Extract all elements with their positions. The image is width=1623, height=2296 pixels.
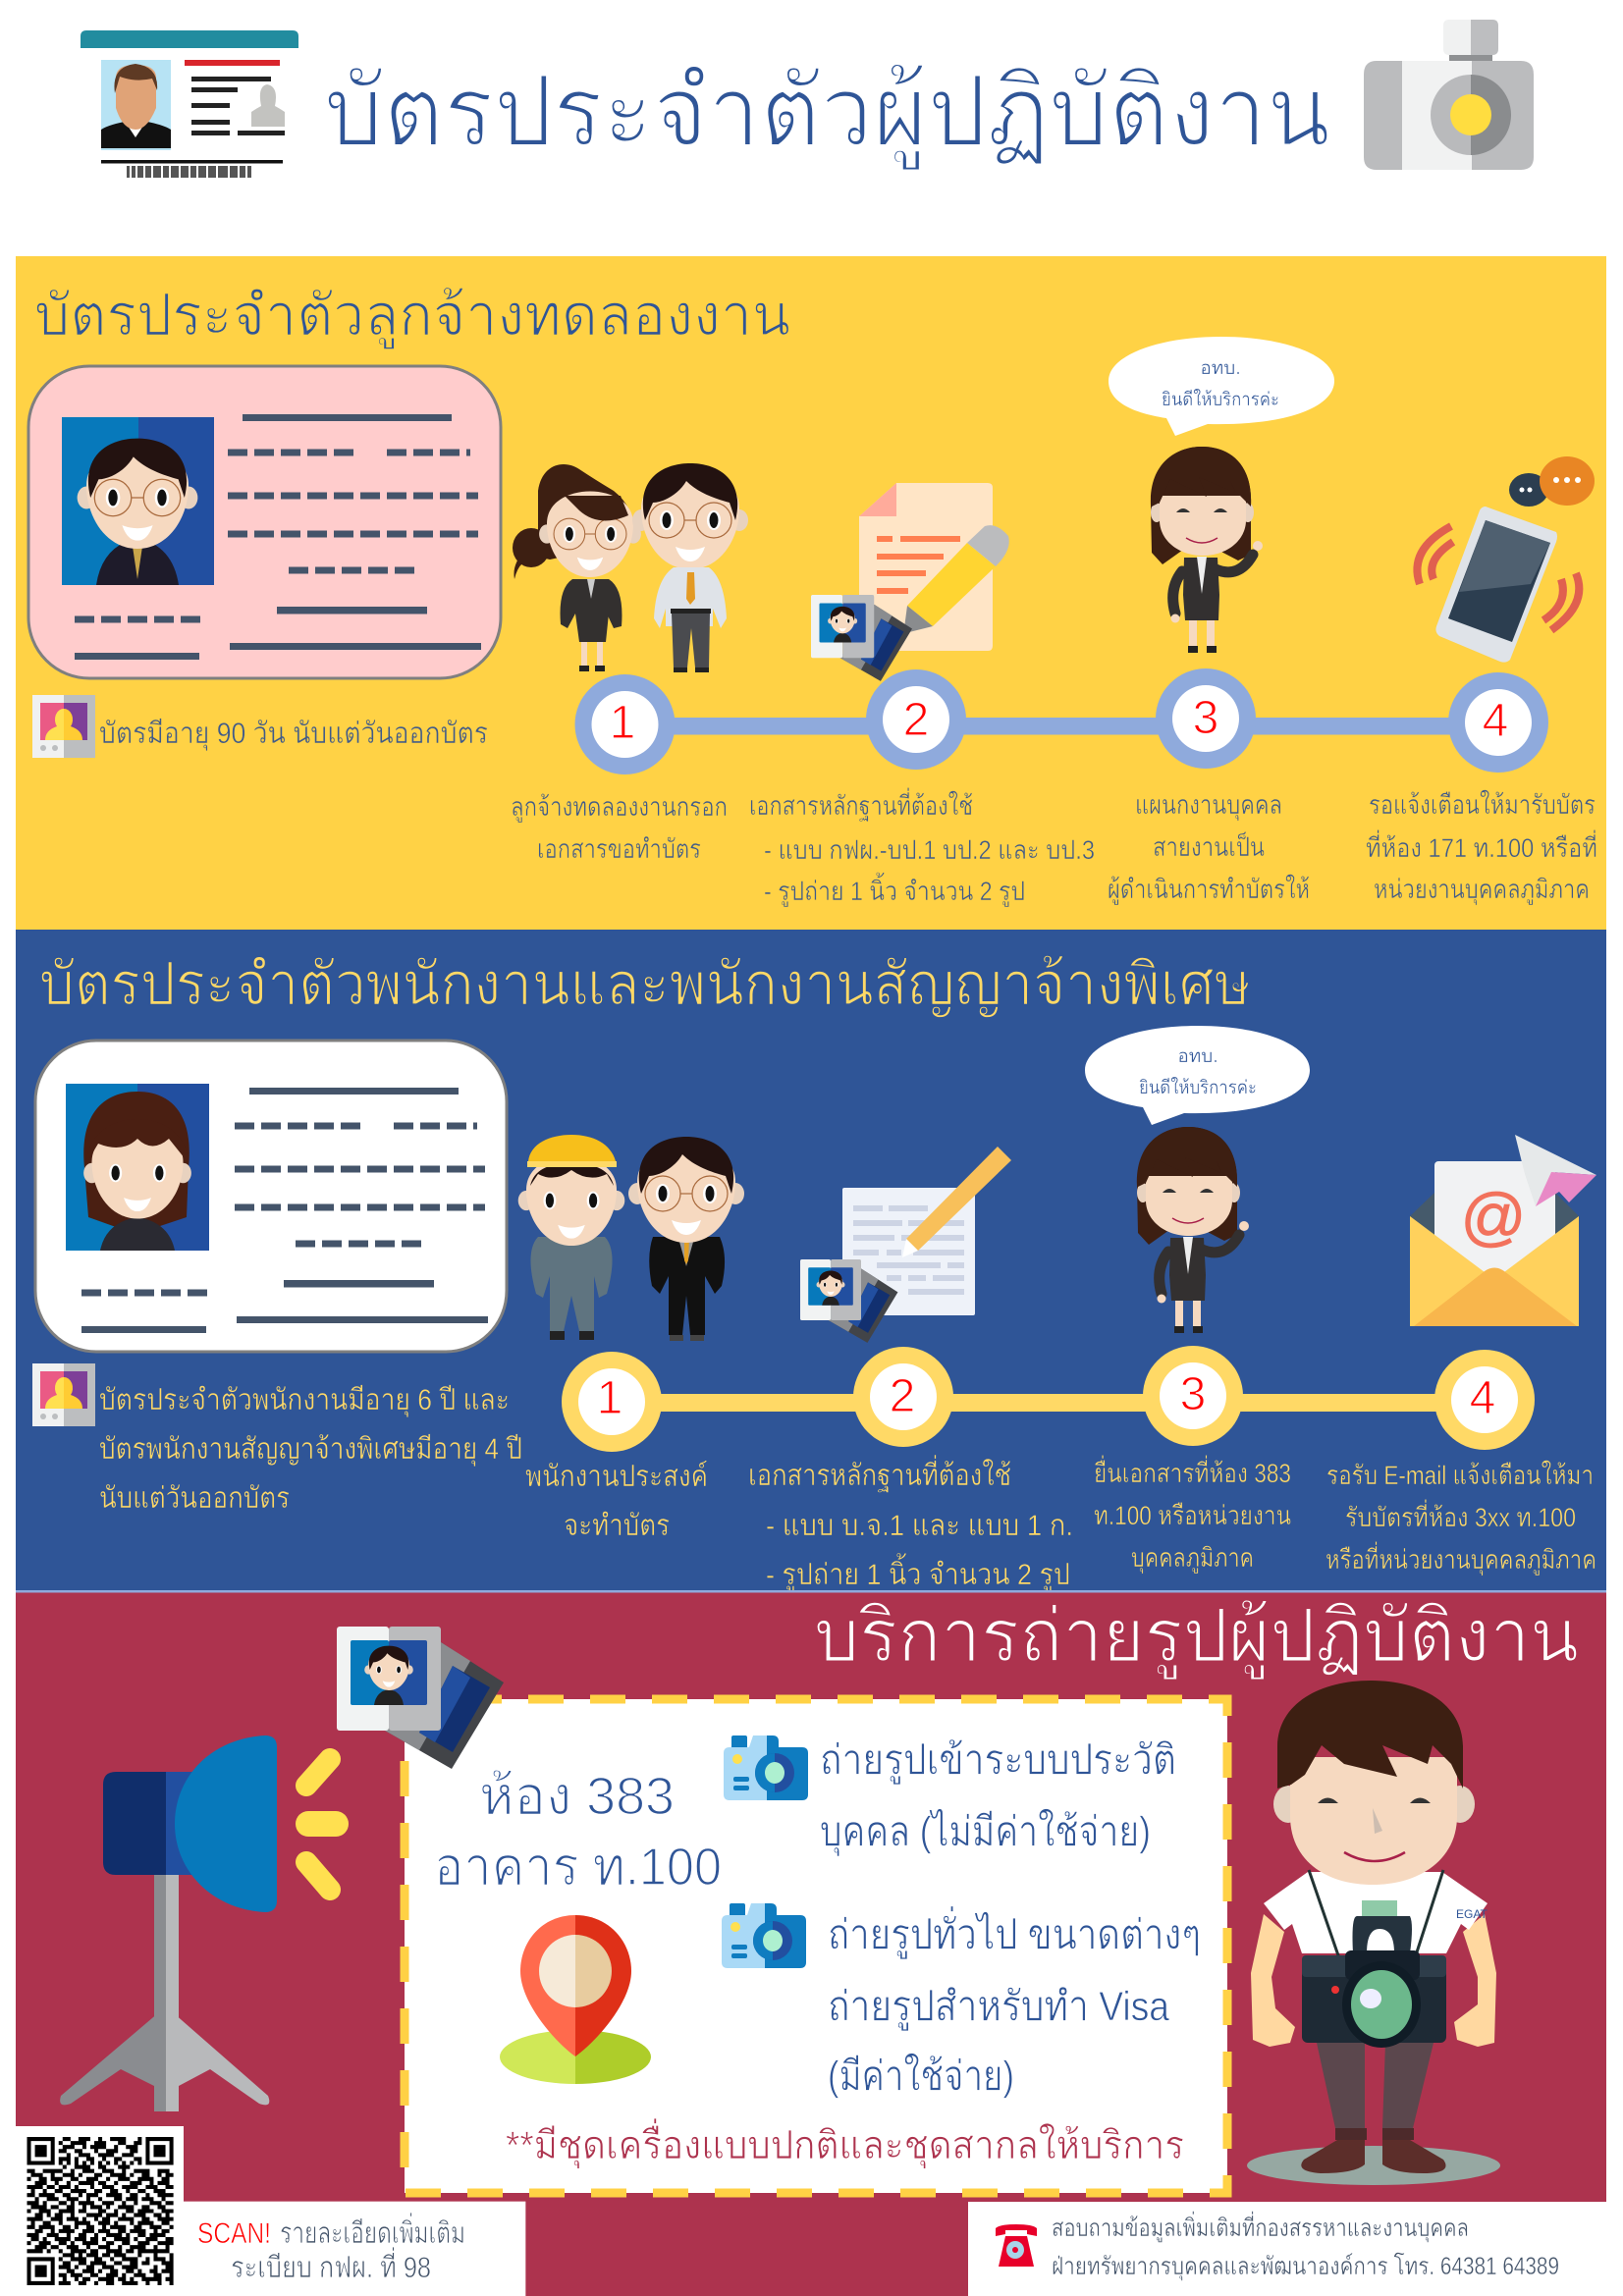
figures: probation employees bbox=[513, 463, 748, 672]
card validity note: บัตรมีอายุ 90 วัน นับแต่วันออกบัตร bbox=[99, 718, 488, 752]
service box bbox=[405, 1699, 1227, 2193]
step 2 text bbox=[749, 787, 1095, 907]
step 2 text: - แบบ กฟผ.-บป.1 บป.2 และ บป.3 bbox=[764, 835, 1095, 865]
step 3 text bbox=[1108, 790, 1310, 905]
figure: HR officer with speech bubble: อทบ. bbox=[1200, 358, 1241, 379]
icon: photo slide bbox=[337, 1627, 504, 1769]
footer: contact: สอบถามข้อมูลเพิ่มเติมที่กองสรรหาและงานบุคคล bbox=[1052, 2211, 1469, 2243]
step 2 text: - รูปถ่าย 1 นิ้ว จำนวน 2 รูป bbox=[766, 1553, 1070, 1592]
figures: employees bbox=[518, 1135, 744, 1341]
step marker 2: 2 bbox=[903, 694, 929, 746]
room location text: ห้อง 383 bbox=[479, 1767, 675, 1826]
step 1 text bbox=[525, 1460, 708, 1542]
step marker 4 bbox=[1448, 672, 1548, 773]
step 3 text: ยื่นเอกสารที่ห้อง 383 bbox=[1094, 1455, 1291, 1488]
figure: HR officer with speech bubble bbox=[1109, 337, 1334, 653]
timeline: employee steps bbox=[562, 1346, 1535, 1452]
uniform note: **มีชุดเครื่องแบบปกติและชุดสากลให้บริการ bbox=[506, 2118, 1184, 2169]
room location text: อาคาร ท.100 bbox=[434, 1838, 722, 1896]
card validity note: บัตรประจำตัวพนักงานมีอายุ 6 ปี และ bbox=[99, 1384, 510, 1418]
figure: email envelope: @ bbox=[1461, 1180, 1526, 1253]
heading: employee card: บัตรประจำตัวพนักงานและพนักงานสัญญาจ้างพิเศษ bbox=[39, 951, 1251, 1018]
step 2 text: - แบบ บ.จ.1 และ แบบ 1 ก. bbox=[766, 1510, 1073, 1542]
figure: HR officer with speech bubble bbox=[1085, 1026, 1310, 1333]
card validity note bbox=[99, 1384, 522, 1515]
step marker 4 bbox=[1434, 1350, 1535, 1450]
step 3 text: สายงานเป็น bbox=[1153, 829, 1265, 862]
step marker 1: 1 bbox=[597, 1372, 622, 1424]
step marker 1 bbox=[562, 1352, 662, 1452]
figure: email envelope bbox=[1410, 1135, 1596, 1326]
panel: employee card (blue) bbox=[16, 930, 1606, 1592]
step 3 text: บุคคลภูมิภาค bbox=[1131, 1543, 1254, 1575]
icon: camera bbox=[724, 1735, 808, 1800]
heading: probation card: บัตรประจำตัวลูกจ้างทดลองงาน bbox=[34, 284, 790, 349]
timeline: probation steps bbox=[575, 668, 1548, 774]
step 2 text: เอกสารหลักฐานที่ต้องใช้ bbox=[749, 787, 973, 822]
icon: location pin bbox=[500, 1915, 651, 2084]
step marker 3: 3 bbox=[1193, 692, 1218, 744]
figure: HR officer with speech bubble: อทบ. bbox=[1177, 1046, 1218, 1067]
figure: phone notification bbox=[1417, 456, 1595, 663]
service: general photo: (มีค่าใช้จ่าย) bbox=[828, 2053, 1014, 2099]
service: HR system photo: ถ่ายรูปเข้าระบบประวัติ bbox=[820, 1736, 1176, 1785]
step marker 4: 4 bbox=[1470, 1372, 1495, 1424]
figure: photographer: EGAT bbox=[1456, 1907, 1488, 1921]
figure: HR officer with speech bubble: ยินดีให้บริการค่ะ bbox=[1162, 389, 1279, 410]
icon: telephone bbox=[996, 2224, 1037, 2267]
icon: card validity bbox=[32, 695, 95, 758]
card illustration bbox=[28, 366, 501, 678]
figure: photographer bbox=[1247, 1681, 1500, 2185]
step marker 2: 2 bbox=[890, 1370, 915, 1422]
step 1 text: จะทำบัตร bbox=[564, 1510, 670, 1542]
step 3 text: ผู้ดำเนินการทำบัตรให้ bbox=[1108, 874, 1310, 905]
panel: photo service (red) bbox=[16, 1590, 1606, 2296]
step 4 text bbox=[1325, 1460, 1596, 1576]
footer: scan note: ระเบียบ กฟผ. ที่ 98 bbox=[231, 2247, 431, 2284]
step marker 2 bbox=[866, 669, 966, 770]
step marker 1: 1 bbox=[610, 697, 635, 749]
service: HR system photo bbox=[820, 1736, 1176, 1857]
step 2 text bbox=[748, 1455, 1073, 1592]
step 4 text: รับบัตรที่ห้อง 3xx ท.100 bbox=[1345, 1499, 1576, 1532]
step marker 3: 3 bbox=[1180, 1368, 1206, 1420]
header icon: camera bbox=[1364, 20, 1534, 170]
service: HR system photo: บุคคล (ไม่มีค่าใช้จ่าย) bbox=[820, 1808, 1151, 1857]
step marker 1 bbox=[575, 674, 676, 774]
qr code bbox=[16, 2126, 184, 2296]
heading: photo service: บริการถ่ายรูปผู้ปฏิบัติงาน bbox=[814, 1594, 1579, 1681]
service: general photo bbox=[828, 1906, 1201, 2099]
step marker 3 bbox=[1143, 1346, 1243, 1446]
step 4 text: ที่ห้อง 171 ท.100 หรือที่ bbox=[1366, 829, 1597, 863]
step 1 text bbox=[511, 792, 728, 864]
footer: scan note: SCAN! bbox=[197, 2217, 271, 2250]
step 2 text: - รูปถ่าย 1 นิ้ว จำนวน 2 รูป bbox=[764, 872, 1025, 907]
step 3 text bbox=[1094, 1455, 1291, 1575]
step marker 2 bbox=[853, 1347, 953, 1447]
footer: contact bbox=[968, 2202, 1606, 2296]
step 3 text: ท.100 หรือหน่วยงาน bbox=[1094, 1501, 1291, 1530]
service: general photo: ถ่ายรูปสำหรับทำ Visa bbox=[828, 1983, 1170, 2031]
title: บัตรประจำตัวผู้ปฏิบัติงาน bbox=[324, 57, 1330, 171]
icon: card validity bbox=[32, 1363, 95, 1426]
footer: scan note: รายละเอียดเพิ่มเติม bbox=[280, 2213, 465, 2250]
figure: HR officer with speech bubble: ยินดีให้บริการค่ะ bbox=[1139, 1077, 1257, 1098]
step 1 text: เอกสารขอทำบัตร bbox=[537, 834, 701, 864]
step 4 text bbox=[1366, 789, 1597, 906]
figure: documents and pencil bbox=[811, 483, 1009, 681]
step 3 text: แผนกงานบุคคล bbox=[1135, 790, 1282, 822]
step marker 4: 4 bbox=[1483, 695, 1508, 747]
step 2 text: เอกสารหลักฐานที่ต้องใช้ bbox=[748, 1455, 1011, 1493]
panel: probation card (yellow) bbox=[16, 256, 1606, 930]
card validity note: นับแต่วันออกบัตร bbox=[99, 1482, 290, 1515]
service: general photo: ถ่ายรูปทั่วไป ขนาดต่างๆ bbox=[828, 1906, 1201, 1959]
footer: scan note bbox=[184, 2202, 525, 2296]
header icon: id card bbox=[81, 30, 298, 182]
figure: document and pencil bbox=[800, 1147, 1011, 1343]
card illustration bbox=[35, 1041, 507, 1352]
step 1 text: พนักงานประสงค์ bbox=[525, 1460, 708, 1493]
icon: camera bbox=[722, 1903, 806, 1968]
room location text bbox=[434, 1767, 722, 1896]
step 1 text: ลูกจ้างทดลองงานกรอก bbox=[511, 792, 728, 823]
icon: studio light bbox=[60, 1735, 336, 2111]
step marker 3 bbox=[1156, 668, 1256, 769]
card validity note: บัตรพนักงานสัญญาจ้างพิเศษมีอายุ 4 ปี bbox=[99, 1433, 522, 1468]
